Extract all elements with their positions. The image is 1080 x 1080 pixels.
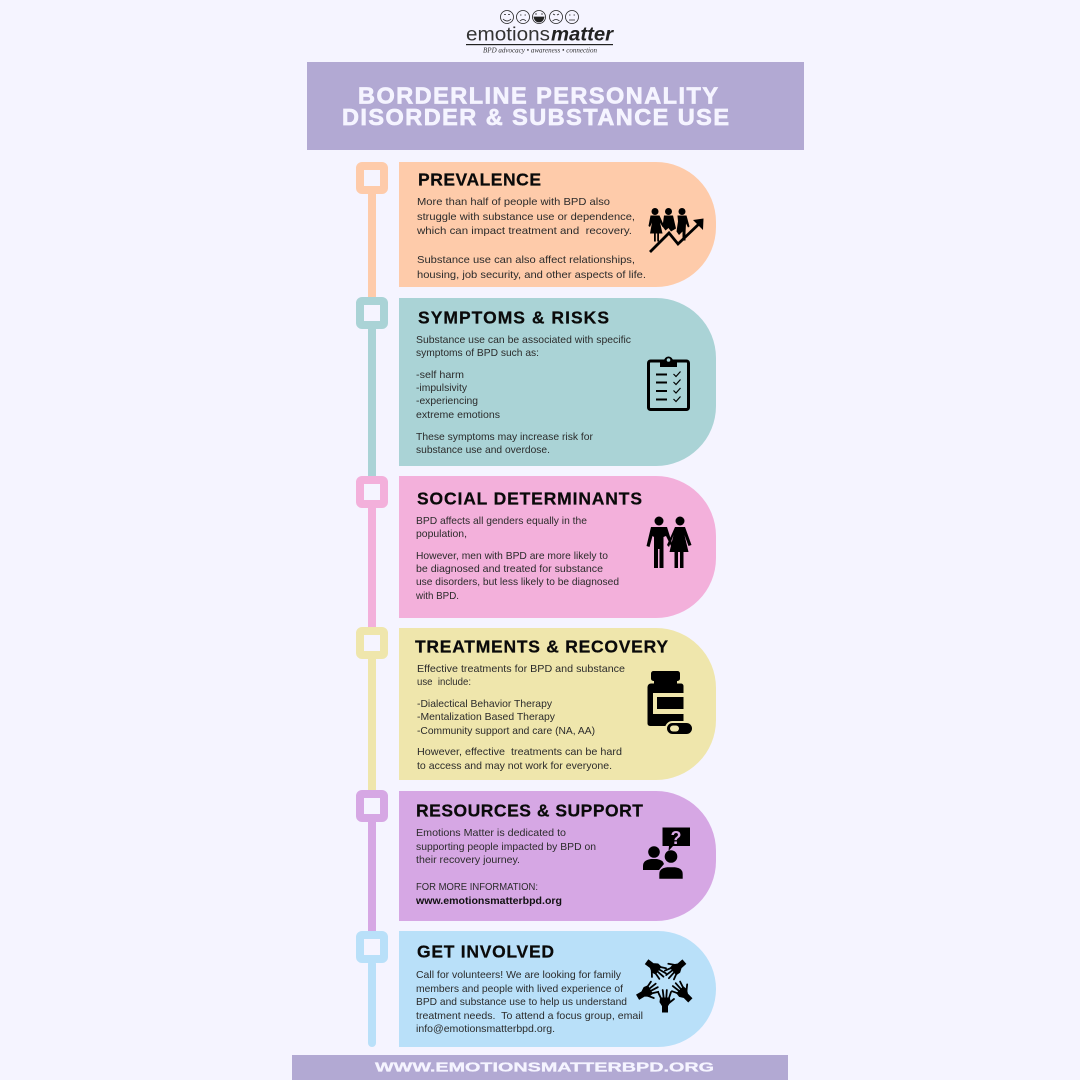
text: social determinants body: be diagnosed and treated for substance xyxy=(416,563,603,575)
text: prevalence body xyxy=(416,196,646,281)
text: symptoms body: -impulsivity xyxy=(416,382,468,394)
text: treatments body: -Mentalization Based Therapy xyxy=(417,711,556,723)
text: treatments body: use include: xyxy=(417,676,471,688)
text: symptoms body: These symptoms may increase risk for xyxy=(416,431,593,443)
text: symptoms body: substance use and overdose. xyxy=(416,444,550,456)
text: social determinants body: However, men with BPD are more likely to xyxy=(416,550,608,562)
text: symptoms body: -self harm xyxy=(416,369,464,381)
title banner xyxy=(307,62,804,150)
text: treatments body: However, effective treatments can be hard xyxy=(417,746,622,758)
heading: treatments and recovery: TREATMENTS & RECOVERY xyxy=(415,636,668,656)
text: treatments body: -Dialectical Behavior Therapy xyxy=(417,698,553,710)
heading: resources and support: RESOURCES & SUPPORT xyxy=(416,800,643,820)
heading: get involved: GET INVOLVED xyxy=(417,942,554,962)
panel: social determinants xyxy=(399,476,716,618)
text: social determinants body: BPD affects all genders equally in the xyxy=(416,515,587,527)
icon: clipboard checklist xyxy=(648,356,688,410)
title xyxy=(342,82,729,130)
text: prevalence body: More than half of people with BPD also xyxy=(417,196,610,208)
text: treatments body: Effective treatments for BPD and substance xyxy=(417,663,625,675)
panel: prevalence xyxy=(399,162,716,287)
timeline: connector stems and square markers xyxy=(360,166,384,1047)
icon: couple holding hands xyxy=(646,516,692,568)
text: prevalence body: which can impact treatment and recovery. xyxy=(416,225,632,237)
logo wordmark: emotions xyxy=(466,24,550,46)
text: social determinants body: use disorders, but less likely to be diagnosed xyxy=(416,576,619,588)
text: get involved body: treatment needs. To attend a focus group, email xyxy=(416,1010,643,1022)
heading: prevalence: PREVALENCE xyxy=(418,170,541,190)
text: get involved body: Call for volunteers! We are looking for family xyxy=(416,969,622,981)
text: get involved body: BPD and substance use to help us understand xyxy=(416,996,627,1008)
title: BORDERLINE PERSONALITY xyxy=(358,82,718,108)
text: treatments body: -Community support and care (NA, AA) xyxy=(417,725,595,737)
text: symptoms body: extreme emotions xyxy=(416,409,500,421)
panel: resources and support xyxy=(399,791,716,921)
text: resources body: FOR MORE INFORMATION: xyxy=(416,881,538,893)
title: DISORDER & SUBSTANCE USE xyxy=(342,104,729,130)
text: get involved body: members and people with lived experience of xyxy=(416,983,623,995)
text: symptoms body: Substance use can be associated with specific xyxy=(416,334,631,346)
icon: medicine bottle and pill xyxy=(648,671,694,736)
icon: five emotion faces xyxy=(500,10,578,24)
icon: two people with question bubble xyxy=(643,828,690,879)
text: prevalence body: struggle with substance use or dependence, xyxy=(417,211,635,223)
footer url: WWW.EMOTIONSMATTERBPD.ORG xyxy=(375,1060,714,1074)
panel: symptoms and risks xyxy=(399,298,716,466)
text: symptoms body: -experiencing xyxy=(416,395,478,407)
text: treatments body: to access and may not work for everyone. xyxy=(417,760,612,772)
panel: treatments and recovery xyxy=(399,628,716,780)
panel: get involved xyxy=(399,931,716,1047)
text: symptoms body xyxy=(416,334,631,456)
text: prevalence body: housing, job security, and other aspects of life. xyxy=(417,269,646,281)
text: social determinants body: population, xyxy=(416,528,467,540)
heading: social determinants: SOCIAL DETERMINANTS xyxy=(417,488,642,508)
text: symptoms body: symptoms of BPD such as: xyxy=(416,347,539,359)
text: prevalence body: Substance use can also affect relationships, xyxy=(417,254,635,266)
text: social determinants body: with BPD. xyxy=(415,590,459,602)
icon: question mark: ? xyxy=(670,828,682,848)
text: get involved body: info@emotionsmatterbpd.org. xyxy=(416,1023,555,1035)
icon: five hands in a circle xyxy=(635,955,696,1012)
logo: emotions matter xyxy=(466,10,614,54)
text: resources body: Emotions Matter is dedicated to xyxy=(416,827,566,839)
logo tagline: BPD advocacy • awareness • connection xyxy=(483,46,597,54)
footer banner xyxy=(292,1055,788,1080)
icon: people and rising arrow xyxy=(648,208,704,252)
text: resources body xyxy=(415,827,596,907)
text: resources body: their recovery journey. xyxy=(416,854,520,866)
text: get involved body xyxy=(416,969,643,1035)
logo: emotions matter: matter xyxy=(551,24,614,46)
text: social determinants body xyxy=(415,515,619,602)
text: resources body: www.emotionsmatterbpd.org xyxy=(415,895,562,907)
text: treatments body xyxy=(417,663,625,772)
text: resources body: supporting people impacted by BPD on xyxy=(416,841,596,853)
heading: symptoms and risks: SYMPTOMS & RISKS xyxy=(418,308,609,328)
